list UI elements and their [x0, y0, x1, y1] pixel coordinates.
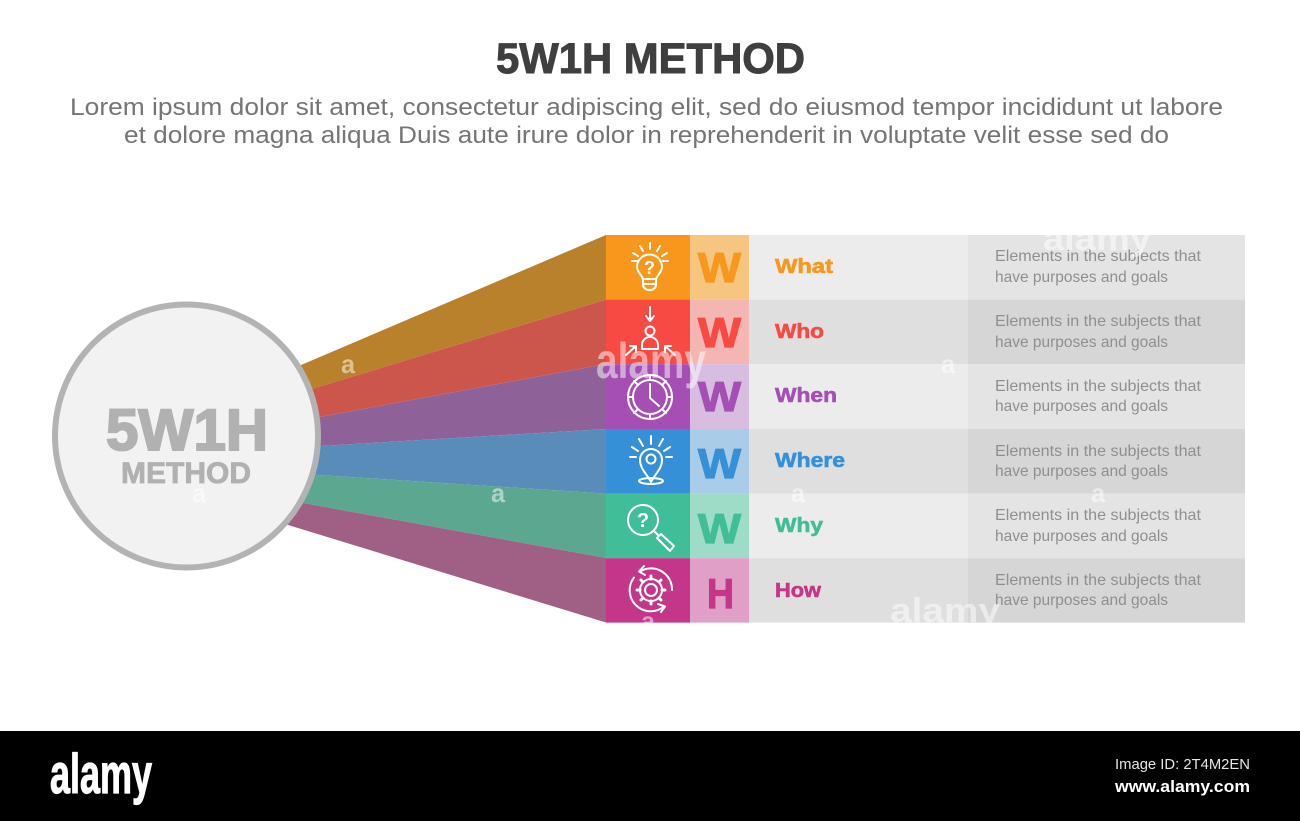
table row: What: Elements in the subjects that	[995, 248, 1202, 265]
table row: Where: W	[698, 440, 741, 487]
icon: light bulb with question mark	[632, 243, 668, 290]
footer bar: alamy	[50, 742, 152, 805]
table row: What	[606, 235, 1245, 300]
watermark text: alamy	[1043, 220, 1151, 258]
icon: magnifier with question mark	[628, 505, 674, 551]
table row: Who: Elements in the subjects that	[995, 313, 1202, 330]
table row: When: When	[775, 385, 837, 407]
table row: Where	[606, 429, 1245, 494]
subtitle text: Lorem ipsum dolor sit amet, consectetur adipiscing elit, sed do eiusmod tempor incididunt ut labore	[70, 94, 1223, 121]
center circle: 5W1H method	[55, 304, 318, 568]
watermark text: a	[791, 478, 806, 508]
table row: Who	[606, 300, 1245, 364]
table row: Why: have purposes and goals	[995, 528, 1168, 545]
table row: When: have purposes and goals	[995, 398, 1168, 415]
watermark text: a	[491, 478, 506, 508]
table row: Who: W	[698, 309, 741, 356]
center circle: 5W1H method: METHOD	[121, 457, 251, 490]
icon: person with arrows	[626, 307, 675, 355]
footer bar: www.alamy.com	[1114, 777, 1250, 796]
watermark text: a	[192, 478, 207, 508]
table row: Where: Where	[775, 450, 845, 472]
table row: What: have purposes and goals	[995, 269, 1168, 286]
center circle: 5W1H method: 5W1H	[106, 398, 268, 463]
table row: How: How	[775, 580, 821, 602]
watermark text: a	[641, 606, 656, 636]
table row: When: Elements in the subjects that	[995, 378, 1202, 395]
table row: Why	[606, 494, 1245, 558]
icon: clock	[628, 375, 672, 419]
subtitle text: et dolore magna aliqua Duis aute irure dolor in reprehenderit in voluptate velit esse sed do	[124, 122, 1169, 149]
table row: How: have purposes and goals	[995, 592, 1168, 609]
icon: gear with circular arrows	[630, 566, 672, 612]
watermark text: a	[1091, 478, 1106, 508]
icon: location pin	[630, 436, 672, 484]
watermark text	[192, 220, 1151, 636]
footer bar: Image ID: 2T4M2EN	[1115, 756, 1250, 773]
watermark text: a	[941, 349, 956, 379]
table row: When	[606, 364, 1245, 429]
table row: Where: have purposes and goals	[995, 463, 1168, 480]
title: 5W1H METHOD	[496, 35, 805, 83]
table row: Where: Elements in the subjects that	[995, 443, 1202, 460]
table row: How	[606, 558, 1245, 623]
icon: magnifier with question mark: ?	[637, 510, 649, 532]
subtitle text	[70, 94, 1223, 149]
icon: light bulb with question mark: ?	[644, 258, 655, 278]
table row: How: H	[707, 570, 734, 617]
watermark text: alamy	[596, 333, 706, 389]
converging colored beams	[280, 235, 606, 622]
table row: How: Elements in the subjects that	[995, 572, 1202, 589]
table row: Why: Why	[775, 515, 824, 537]
table row: Who: Who	[775, 321, 824, 343]
table row: When: W	[698, 373, 741, 420]
watermark text: a	[341, 349, 356, 379]
footer bar	[0, 731, 1300, 821]
table row: What: What	[775, 256, 833, 278]
table row: Why: Elements in the subjects that	[995, 507, 1202, 524]
watermark text: alamy	[890, 592, 1000, 630]
table row: What: W	[698, 244, 741, 291]
table row: Why: W	[698, 505, 741, 552]
table row: Who: have purposes and goals	[995, 334, 1168, 351]
